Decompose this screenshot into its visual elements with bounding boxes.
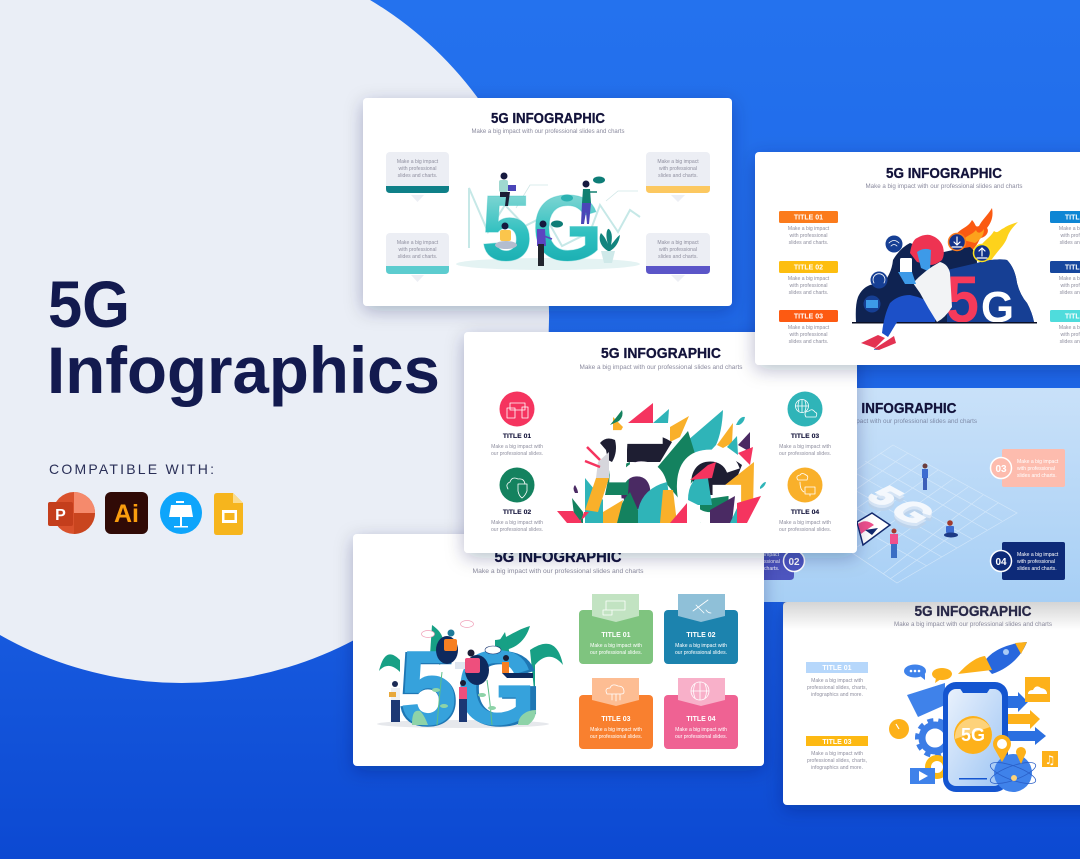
label: right title 02 <box>1050 261 1080 296</box>
slide title: 5G INFOGRAPHIC <box>914 604 1032 620</box>
label: title 01: professional slides, charts, <box>807 685 867 691</box>
illustration: woman on phone with 5G: G <box>981 283 1014 332</box>
main heading <box>47 267 440 407</box>
woman with phone <box>573 439 616 523</box>
card: title 01: TITLE 01 <box>601 632 631 639</box>
light circle backdrop <box>0 0 549 683</box>
label: title 03: TITLE 03 <box>794 314 823 320</box>
speech bubbles <box>422 620 474 638</box>
speech bubbles <box>904 664 952 683</box>
3D 5G letters: G <box>880 501 944 536</box>
woman reclining <box>502 655 533 678</box>
item: title 03 <box>779 392 831 457</box>
callout: 03: slides and charts. <box>1017 473 1057 479</box>
panel: people on blue 5G slide <box>353 534 764 766</box>
label: title 02: slides and charts. <box>789 290 828 296</box>
person standing <box>890 528 898 558</box>
background leaves <box>379 625 563 700</box>
speech bubbles <box>551 176 605 228</box>
callout: 03: with professional <box>1017 466 1055 472</box>
item: title 04 <box>779 468 831 533</box>
icon: Illustrator <box>105 492 148 534</box>
callout: 02: 02 <box>788 557 800 568</box>
card: title 01 <box>579 594 653 664</box>
illustration: teal 5G with people: 5G <box>481 176 603 280</box>
3D 5G letters: G <box>880 498 944 533</box>
icon: clock <box>889 719 909 739</box>
white 5G: letter: G <box>673 429 747 546</box>
card: title 04: TITLE 04 <box>686 716 716 723</box>
callout: bottom right <box>646 233 710 282</box>
person on the 5 <box>499 172 516 206</box>
callout: 03 <box>990 449 1065 487</box>
icon: music tile <box>1042 751 1058 767</box>
slide title: 5G INFOGRAPHIC <box>601 345 721 362</box>
callout: 04 <box>990 542 1065 580</box>
illustration: woman on phone with 5G <box>852 208 1037 350</box>
callout: bottom left: Make a big impact <box>397 240 439 246</box>
main heading: 5G <box>48 267 130 341</box>
callout: 03: Make a big impact <box>1017 459 1059 465</box>
slide subtitle: Make a big impact with our professional slides and charts <box>894 621 1052 628</box>
icon: video tile <box>910 768 935 784</box>
callout: top left: slides and charts. <box>398 173 437 179</box>
front leaves <box>557 410 766 523</box>
card: title 01: Make a big impact with <box>590 643 642 649</box>
item: title 02: Make a big impact with <box>491 520 543 526</box>
3D 5G letters: 5 <box>858 487 912 517</box>
item: title 01: Make a big impact with <box>491 444 543 450</box>
item: title 04: Make a big impact with <box>779 520 831 526</box>
item: title 03: Make a big impact with <box>779 444 831 450</box>
callout: top right: with professional <box>659 166 697 172</box>
illustration: blue 5G with people: 5G <box>400 630 536 747</box>
compatible with label: COMPATIBLE WITH: <box>49 461 214 477</box>
slide title: 5G INFOGRAPHIC <box>886 166 1002 182</box>
label: right title 01 <box>1050 211 1080 246</box>
person sitting in the 5 <box>495 222 517 249</box>
label: title 02: TITLE 02 <box>794 264 823 272</box>
icon: Illustrator: Ai <box>114 500 139 528</box>
3D 5G letters <box>868 485 932 529</box>
item: title 02: our professional slides. <box>491 527 543 533</box>
man with laptop <box>455 650 489 685</box>
panel: woman with flames slide <box>755 152 1080 365</box>
label: title 03: professional slides, charts, <box>807 758 867 764</box>
callout: bottom left: slides and charts. <box>398 254 437 260</box>
label: title 01: infographics and more. <box>811 692 863 698</box>
person with book <box>389 681 400 722</box>
phone <box>943 682 1008 792</box>
label: title 02: Make a big impact <box>788 276 830 282</box>
item: title 01: our professional slides. <box>491 451 543 457</box>
card: title 04 <box>664 678 738 749</box>
card: title 02: our professional slides. <box>675 650 727 656</box>
flames <box>955 208 1018 262</box>
3D 5G letters: 5 <box>858 481 912 511</box>
person with phone <box>922 464 928 490</box>
card: title 02: Make a big impact with <box>675 643 727 649</box>
label: title 01 <box>779 211 838 246</box>
label: title 02: with professional <box>790 283 827 289</box>
illustration: blue 5G with people: 5G <box>398 631 542 748</box>
card: title 04: our professional slides. <box>675 734 727 740</box>
callout: top left: with professional <box>399 166 436 172</box>
card: title 03: Make a big impact with <box>590 727 642 733</box>
icon: rocket <box>958 642 1027 674</box>
label: title 03: with professional <box>790 332 827 338</box>
label: title 01 <box>806 662 868 698</box>
label: title 01: slides and charts. <box>789 240 828 246</box>
callout: 04: Make a big impact <box>1017 552 1059 558</box>
callout: 04: with professional <box>1017 559 1055 565</box>
arrows <box>1005 692 1046 745</box>
label: title 03: infographics and more. <box>811 765 863 771</box>
card: title 01: our professional slides. <box>590 650 642 656</box>
ground leaves <box>412 710 536 725</box>
label: title 03: TITLE 03 <box>822 739 852 746</box>
panel: teal 5G slide <box>363 98 732 306</box>
callout: 04: 04 <box>995 557 1007 568</box>
card: title 03: our professional slides. <box>590 734 642 740</box>
icon: Google Slides <box>214 493 243 535</box>
3D 5G letters: G <box>880 495 944 530</box>
callout: bottom right: slides and charts. <box>658 254 698 260</box>
card: title 03: TITLE 03 <box>601 716 631 723</box>
tech icons <box>864 234 990 312</box>
illustration: phone with 5G <box>889 642 1058 792</box>
person standing front <box>537 220 552 266</box>
callout: 02: charts. <box>764 566 779 572</box>
label: right title 03 <box>1050 310 1080 345</box>
icon: envelope <box>907 683 945 717</box>
item: title 04: our professional slides. <box>779 527 831 533</box>
icon: Keynote <box>160 492 202 534</box>
callout: bottom left: with professional <box>399 247 436 253</box>
icon: music tile: ♫ <box>1045 753 1055 767</box>
callout: top right: slides and charts. <box>658 173 698 179</box>
label: title 03: slides and charts. <box>789 339 828 345</box>
slide title: 5G INFOGRAPHIC <box>491 111 605 127</box>
card: title 02 <box>664 594 738 664</box>
card: title 04: Make a big impact with <box>675 727 727 733</box>
card: title 02: TITLE 02 <box>686 632 716 639</box>
label: title 03 <box>779 310 838 345</box>
slide title: 5G INFOGRAPHIC <box>840 401 957 417</box>
vine <box>437 672 492 725</box>
label: title 03: Make a big impact <box>788 325 830 331</box>
white 5G: digit: 5 <box>603 401 671 552</box>
callout: top left: Make a big impact <box>397 159 439 165</box>
label: title 02 <box>779 261 838 296</box>
tablet chart <box>857 513 890 545</box>
callout: top right <box>646 152 710 202</box>
callout: top left <box>386 152 449 202</box>
item: title 04: TITLE 04 <box>791 509 819 516</box>
back leaves <box>605 403 754 523</box>
slide title: 5G INFOGRAPHIC <box>494 549 622 566</box>
dark blob <box>856 243 1034 322</box>
woman on top <box>436 630 458 664</box>
slide subtitle: Make a big impact with our professional slides and charts <box>472 568 644 575</box>
5G letters: 5 <box>946 262 979 336</box>
label: title 01: Make a big impact <box>788 226 830 232</box>
illustration: blue 5G with people <box>377 620 563 748</box>
slide subtitle: Make a big impact with our professional slides and charts <box>866 183 1022 190</box>
woman standing <box>459 680 467 722</box>
icon: PowerPoint: P <box>55 507 66 524</box>
card: title 03 <box>579 678 653 749</box>
callout: 02: ssional <box>764 559 780 565</box>
callout: bottom left <box>386 233 449 282</box>
callout: 03: 03 <box>995 464 1007 475</box>
app icons <box>48 492 243 535</box>
plant <box>600 229 620 263</box>
callout: 04: slides and charts. <box>1017 566 1057 572</box>
panel: leafy 5G slide <box>464 332 857 553</box>
ground line <box>852 322 1037 324</box>
label: title 01: Make a big impact with <box>811 678 863 684</box>
illustration: leafy 5G <box>557 401 766 552</box>
callout: bottom right: with professional <box>659 247 697 253</box>
gears <box>917 720 953 776</box>
icon: PowerPoint <box>48 492 95 534</box>
slide subtitle: Make a big impact with our professional slides and charts <box>580 364 742 371</box>
item: title 02: TITLE 02 <box>503 509 531 516</box>
callout: 02 <box>764 553 806 580</box>
3D 5G letters: 5 <box>858 484 912 514</box>
item: title 03: TITLE 03 <box>791 433 819 440</box>
woman <box>861 235 952 350</box>
item: title 01: TITLE 01 <box>503 433 531 440</box>
globe with pins <box>988 735 1038 792</box>
slide subtitle: Make a big impact with our professional slides and charts <box>472 128 624 135</box>
item: title 01 <box>491 392 543 457</box>
isometric grid <box>852 444 1018 584</box>
label: title 03 <box>806 736 868 771</box>
label: title 01: with professional <box>790 233 827 239</box>
label: title 01: TITLE 01 <box>794 214 823 222</box>
item: title 03: our professional slides. <box>779 451 831 457</box>
phone: 5G <box>961 725 985 745</box>
panel: phone 5G slide <box>783 602 1080 805</box>
illustration: teal 5G with people <box>456 172 640 280</box>
shadow band from isometric slide <box>783 602 1080 630</box>
person standing on G <box>581 180 597 224</box>
main heading: Infographics <box>47 333 440 407</box>
callout: 02: impact <box>764 552 780 558</box>
label: title 01: TITLE 01 <box>822 665 852 672</box>
slide subtitle: Make a big impact with our professional slides and charts <box>817 418 977 425</box>
label: title 03: Make a big impact with <box>811 751 863 757</box>
panel: isometric 5G slide <box>764 388 1080 602</box>
item: title 02 <box>491 468 543 533</box>
callout: top right: Make a big impact <box>657 159 699 165</box>
icon: cloud tile <box>1025 677 1050 702</box>
person seated <box>944 520 958 538</box>
callout: bottom right: Make a big impact <box>657 240 699 246</box>
